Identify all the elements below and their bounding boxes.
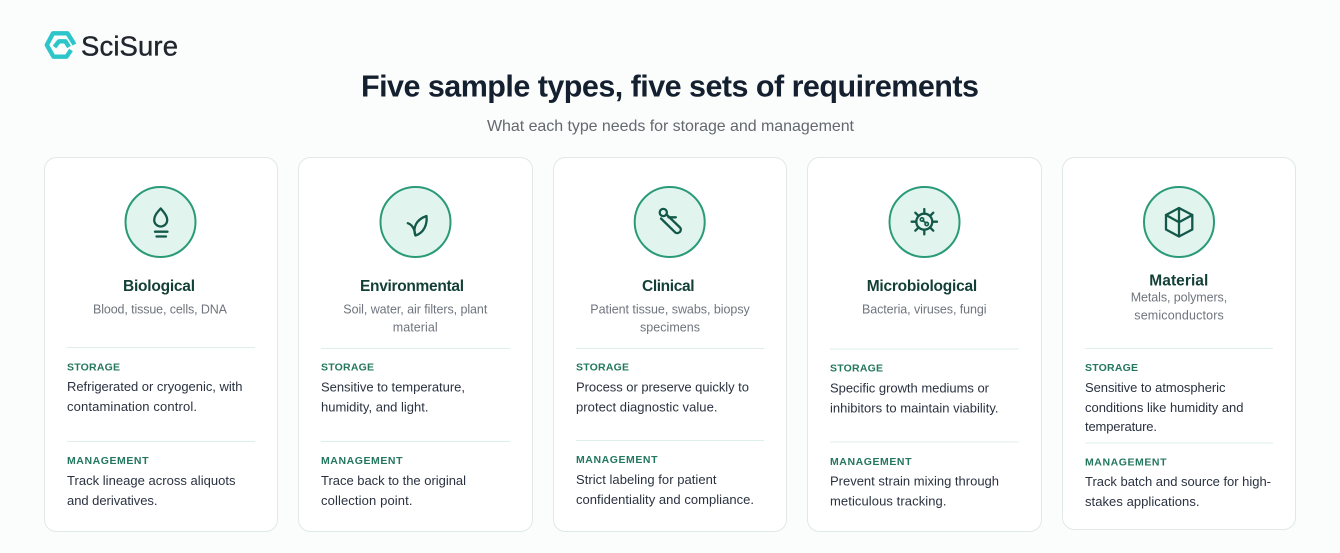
description: Environmental: Soil, water, air filters, plant — [343, 302, 488, 316]
management: Material — [1085, 456, 1271, 509]
storage: Clinical: protect diagnostic value. — [576, 400, 718, 414]
panel: Biological — [44, 158, 278, 532]
heading: Environmental: Environmental — [360, 278, 464, 295]
storage: Environmental: STORAGE — [321, 362, 374, 374]
description: Clinical: specimens — [640, 320, 700, 334]
management: Microbiological — [830, 456, 999, 508]
panel: Material — [1062, 158, 1296, 530]
description: Microbiological: Bacteria, viruses, fungi — [862, 302, 986, 316]
management: Environmental: MANAGEMENT — [321, 455, 403, 467]
management: Environmental: collection point. — [321, 493, 412, 508]
management: Biological: Track lineage across aliquots — [67, 473, 236, 488]
storage: Material: temperature. — [1085, 419, 1157, 434]
management: Biological: and derivatives. — [67, 493, 158, 508]
management: Microbiological: Prevent strain mixing through — [830, 474, 999, 488]
management: Material: Track batch and source for high- — [1085, 474, 1271, 489]
storage: Biological: contamination control. — [67, 399, 197, 414]
storage: Environmental: humidity, and light. — [321, 400, 428, 414]
storage: Material: STORAGE — [1085, 362, 1138, 374]
management: Microbiological: meticulous tracking. — [830, 494, 946, 508]
management: Clinical: MANAGEMENT — [576, 454, 658, 466]
heading: Clinical: Clinical — [642, 278, 694, 295]
description: Environmental: material — [393, 320, 438, 334]
panel: Environmental — [298, 158, 532, 532]
heading: Material: Material — [1149, 272, 1208, 289]
heading: Biological: Biological — [123, 278, 195, 295]
storage: Clinical: STORAGE — [576, 362, 629, 374]
icon: microbe — [890, 187, 960, 257]
storage: Microbiological: STORAGE — [830, 362, 883, 374]
subtitle: What each type needs for storage and management — [487, 118, 855, 135]
management: Environmental — [321, 455, 466, 508]
storage: Biological: STORAGE — [67, 362, 120, 374]
management: Material: stakes applications. — [1085, 494, 1200, 509]
icon: leaf — [380, 187, 450, 257]
heading: Microbiological: Microbiological — [867, 278, 977, 295]
storage: Biological: Refrigerated or cryogenic, with — [67, 379, 242, 394]
description: Material: Metals, polymers, — [1131, 290, 1227, 304]
storage: Microbiological: Specific growth mediums or — [830, 380, 990, 396]
storage: Material — [1085, 362, 1244, 434]
storage: Microbiological — [830, 362, 998, 416]
description: Environmental — [343, 302, 488, 334]
logo mark — [47, 33, 74, 57]
description: Clinical: Patient tissue, swabs, biopsy — [590, 302, 751, 316]
icon: water drop — [126, 187, 196, 257]
description: Material: semiconductors — [1134, 308, 1224, 322]
management: Clinical: Strict labeling for patient — [576, 472, 717, 487]
logo: SciSure — [47, 30, 178, 62]
description: Material — [1131, 290, 1227, 322]
management: Material: MANAGEMENT — [1085, 456, 1167, 468]
storage: Microbiological: inhibitors to maintain viability. — [830, 400, 998, 416]
description: Clinical — [590, 302, 751, 334]
management: Clinical: confidentiality and compliance. — [576, 492, 754, 507]
storage: Material: conditions like humidity and — [1085, 400, 1244, 415]
storage: Clinical — [576, 362, 749, 414]
icon: swab — [635, 187, 705, 257]
storage: Environmental — [321, 362, 465, 414]
title: Five sample types, five sets of requirements — [361, 70, 979, 104]
description: Biological: Blood, tissue, cells, DNA — [93, 302, 228, 316]
panel: Clinical — [554, 158, 786, 532]
management: Microbiological: MANAGEMENT — [830, 456, 912, 468]
icon: cube — [1144, 187, 1214, 257]
storage: Clinical: Process or preserve quickly to — [576, 380, 749, 394]
management: Biological — [67, 455, 236, 508]
management: Clinical — [576, 454, 754, 507]
logo wordmark: SciSure — [81, 30, 178, 62]
panel: Microbiological — [808, 158, 1042, 532]
management: Biological: MANAGEMENT — [67, 455, 149, 467]
management: Environmental: Trace back to the original — [321, 473, 466, 488]
storage: Biological — [67, 362, 242, 414]
storage: Material: Sensitive to atmospheric — [1085, 380, 1226, 395]
storage: Environmental: Sensitive to temperature, — [321, 380, 465, 394]
